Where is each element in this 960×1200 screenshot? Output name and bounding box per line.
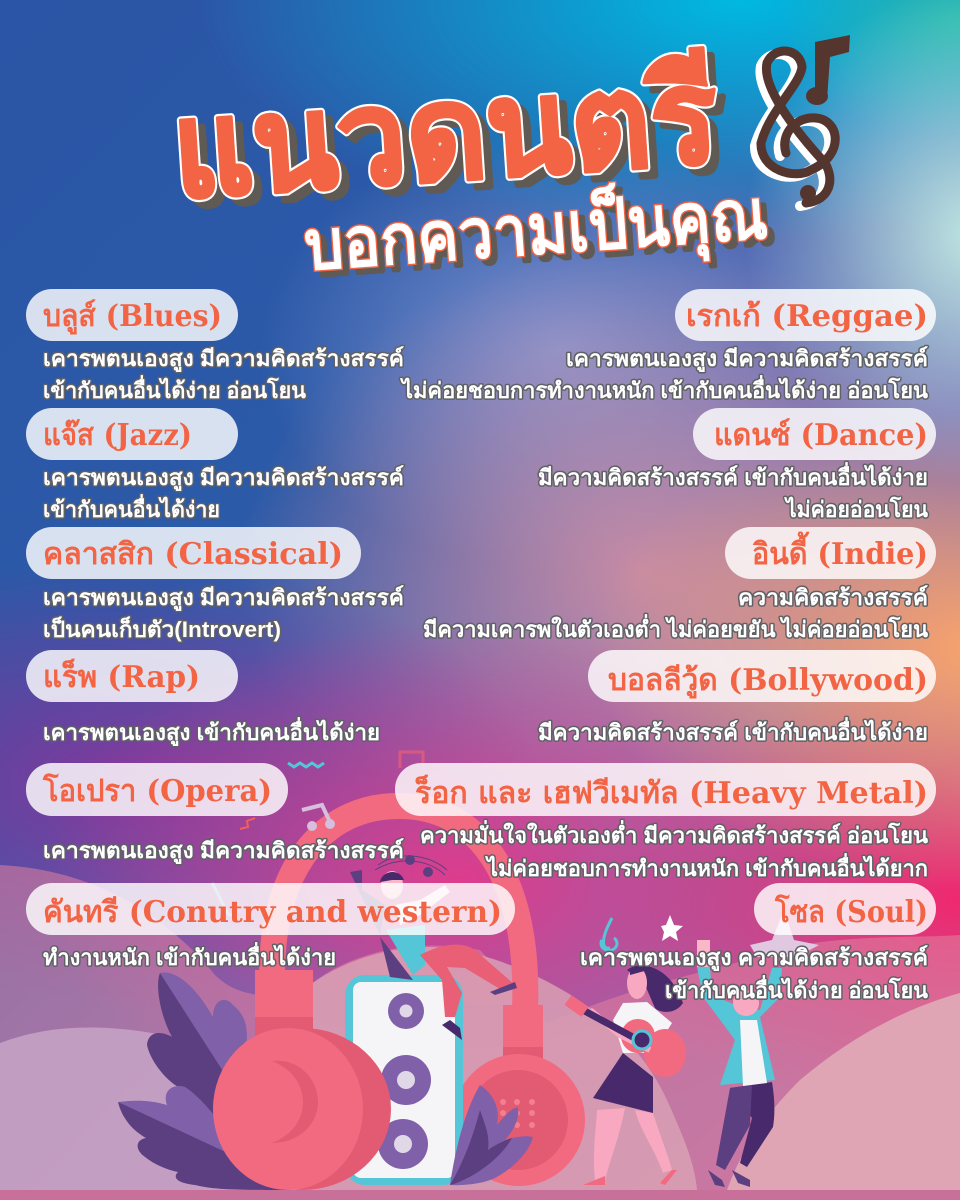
background hills	[0, 865, 960, 1200]
panel: Soul: เคารพตนเองสูง ความคิดสร้างสรรค์	[580, 945, 928, 972]
panel: Soul	[580, 883, 936, 1003]
panel: Jazz: แจ๊ส (Jazz)	[43, 418, 192, 453]
panel: Indie: อินดี้ (Indie)	[752, 531, 928, 572]
decorative music marks	[212, 752, 819, 957]
panel: Soul: เข้ากับคนอื่นได้ง่าย อ่อนโยน	[665, 974, 928, 1003]
panel: Reggae	[400, 289, 936, 403]
panel: Blues	[26, 289, 404, 403]
panel: Blues: เข้ากับคนอื่นได้ง่าย อ่อนโยน	[43, 374, 306, 403]
subtitle: บอกความเป็นคุณ	[301, 171, 770, 290]
panel: Blues: บลูส์ (Blues)	[43, 299, 222, 335]
panel: Country: คันทรี (Conutry and western)	[43, 895, 502, 930]
panel: Reggae: ไม่ค่อยชอบการทำงานหนัก เข้ากับคนอื่นได้ง่าย อ่อนโยน	[400, 374, 928, 403]
panel: Soul: โซล (Soul)	[774, 893, 928, 930]
pill heading	[26, 289, 238, 341]
title: แนวดนตรี	[168, 42, 722, 225]
illustration: dancing man	[697, 940, 782, 1187]
panel: Indie	[423, 527, 936, 642]
illustration: right plant	[450, 1085, 533, 1185]
panel: Bollywood	[538, 650, 936, 745]
panel: Dance: ไม่ค่อยอ่อนโยน	[784, 496, 928, 522]
illustration: speaker	[345, 975, 463, 1185]
panel: Rock and Heavy Metal: ความมั่นใจในตัวเองต่ำ มีความคิดสร้างสรรค์ อ่อนโยน	[420, 819, 928, 848]
panel: Dance: มีความคิดสร้างสรรค์ เข้ากับคนอื่นได้ง่าย	[538, 461, 928, 490]
illustration: left headphone cup	[213, 1028, 391, 1190]
panel: Rock and Heavy Metal: ไม่ค่อยชอบการทำงานหนัก เข้ากับคนอื่นได้ยาก	[485, 852, 928, 881]
panel: Bollywood: มีความคิดสร้างสรรค์ เข้ากับคนอื่นได้ง่าย	[538, 716, 928, 745]
panel: Classical: คลาสสิก (Classical)	[43, 537, 343, 572]
panel: Rap	[26, 650, 380, 747]
icon: treble clef and note	[755, 35, 850, 206]
panel: Rap: เคารพตนเองสูง เข้ากับคนอื่นได้ง่าย	[43, 716, 380, 747]
panel: Opera	[26, 763, 404, 865]
panel: Reggae: เคารพตนเองสูง มีความคิดสร้างสรรค์	[566, 346, 928, 373]
panel: Classical: เป็นคนเก็บตัว(Introvert)	[43, 615, 281, 642]
panel: Rap: แร็พ (Rap)	[43, 658, 200, 695]
illustration: headphones	[255, 806, 585, 1186]
illustration: sitting person	[350, 855, 517, 1040]
panel: Classical: เคารพตนเองสูง มีความคิดสร้างสรรค์	[43, 585, 404, 612]
panel: Reggae: เรกเก้ (Reggae)	[686, 299, 928, 334]
panel: Rock and Heavy Metal: ร็อก และ เฮฟวีเมทัล (Heavy Metal)	[415, 774, 928, 811]
title: แนวดนตรี	[177, 50, 730, 232]
panel: Country	[26, 883, 515, 970]
panel: Rock and Heavy Metal	[395, 763, 936, 881]
panel: Classical	[26, 527, 404, 642]
illustration: left plant	[118, 973, 290, 1190]
panel: Country: ทำงานหนัก เข้ากับคนอื่นได้ง่าย	[43, 941, 336, 970]
panel: Indie: มีความเคารพในตัวเองต่ำ ไม่ค่อยขยัน ไม่ค่อยอ่อนโยน	[423, 613, 928, 642]
panel: Indie: ความคิดสร้างสรรค์	[738, 585, 928, 610]
illustration: woman with guitar	[568, 965, 686, 1185]
panel: Bollywood: บอลลีวู้ด (Bollywood)	[608, 663, 928, 699]
panel: Jazz: เคารพตนเองสูง มีความคิดสร้างสรรค์	[43, 465, 404, 492]
panel: Jazz: เข้ากับคนอื่นได้ง่าย	[43, 493, 220, 522]
panel: Dance: แดนซ์ (Dance)	[714, 418, 928, 453]
title: แนวดนตรี	[168, 42, 722, 225]
panel: Opera: โอเปรา (Opera)	[42, 772, 272, 809]
panel: Dance	[538, 408, 936, 522]
panel: Opera: เคารพตนเองสูง มีความคิดสร้างสรรค์	[43, 838, 404, 865]
panel: Jazz	[26, 408, 404, 522]
panel: Blues: เคารพตนเองสูง มีความคิดสร้างสรรค์	[43, 346, 404, 373]
subtitle: บอกความเป็นคุณ	[308, 176, 777, 296]
